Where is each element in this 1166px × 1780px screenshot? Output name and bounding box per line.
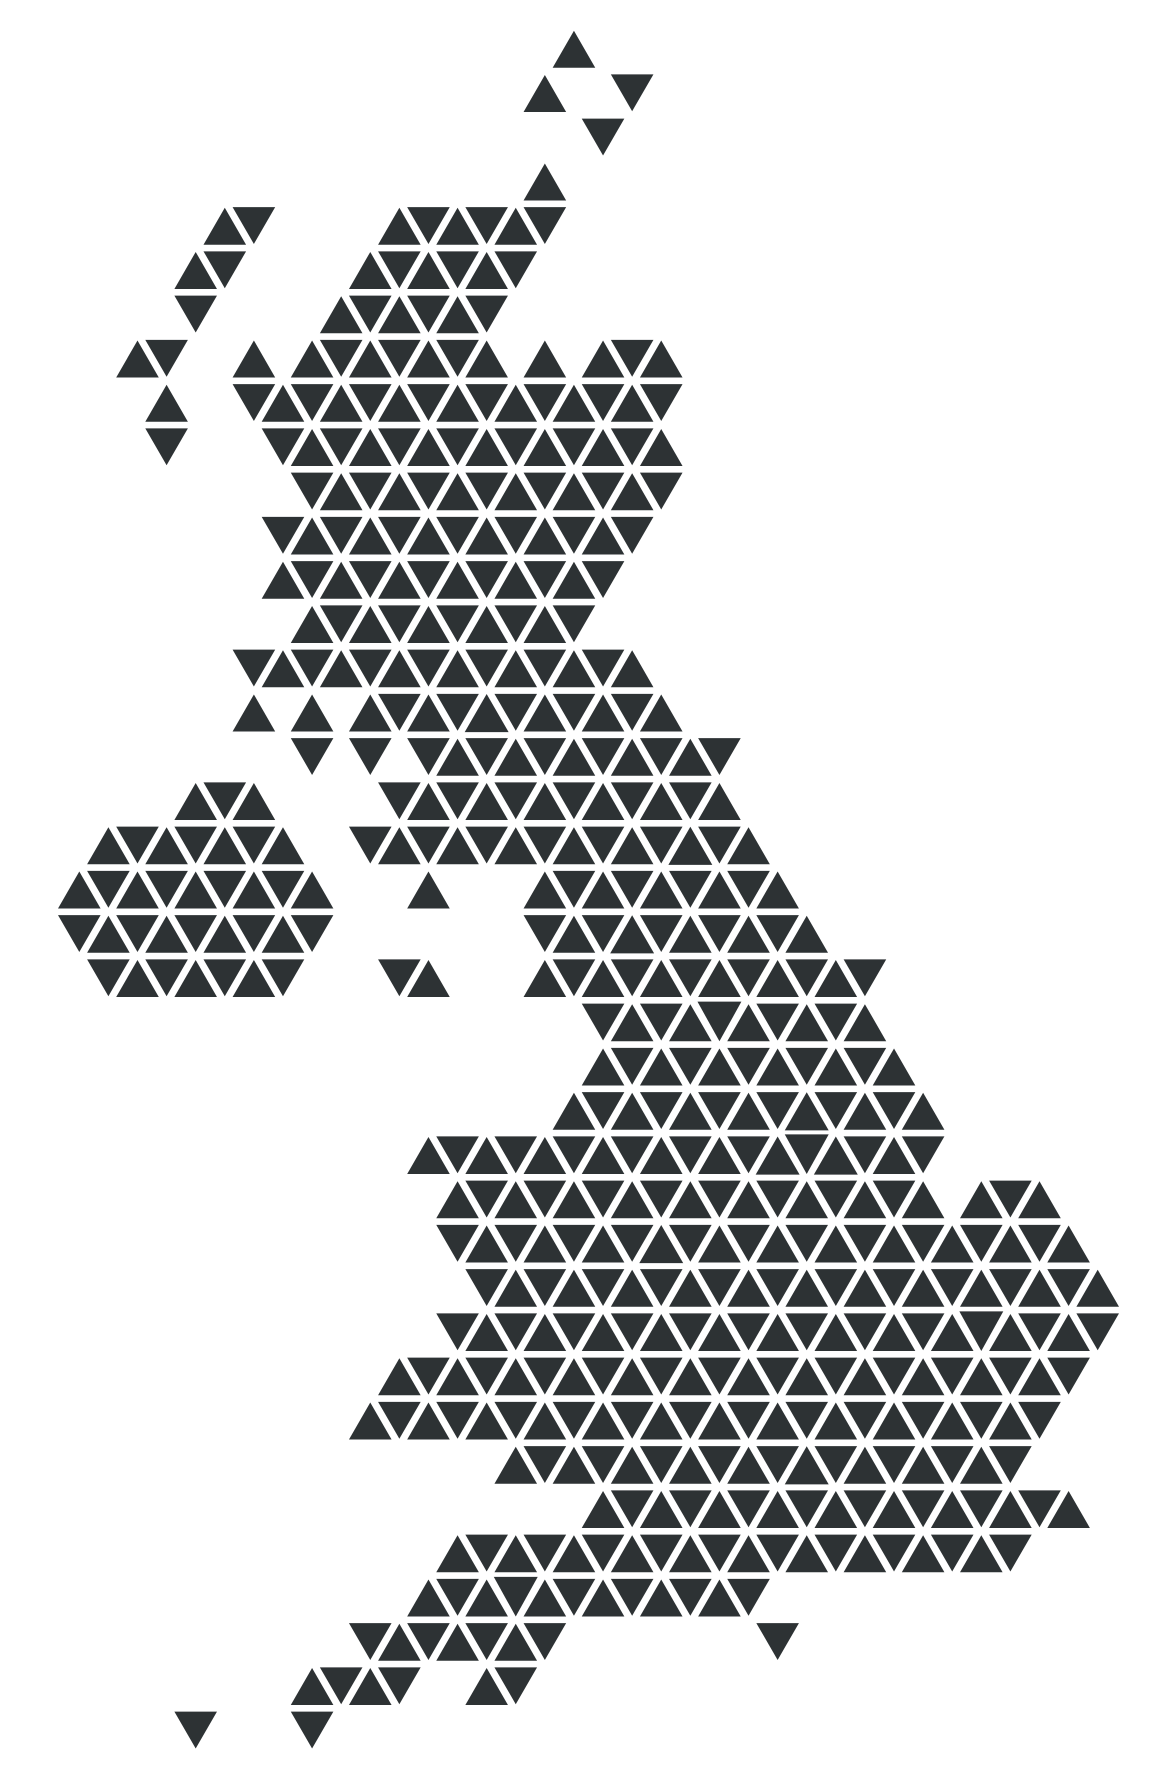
icon: Great Britain mainland triangles [233,163,1119,1748]
icon: Isles of Scilly triangle [174,1712,217,1748]
icon: Shetland and Orkney island triangles [524,31,653,155]
icon: Isle of Man triangles [378,871,450,997]
icon: Isle of Wight triangle [756,1623,799,1660]
icon: Ireland triangles [58,782,333,997]
icon: Outer Hebrides triangles [116,207,275,465]
